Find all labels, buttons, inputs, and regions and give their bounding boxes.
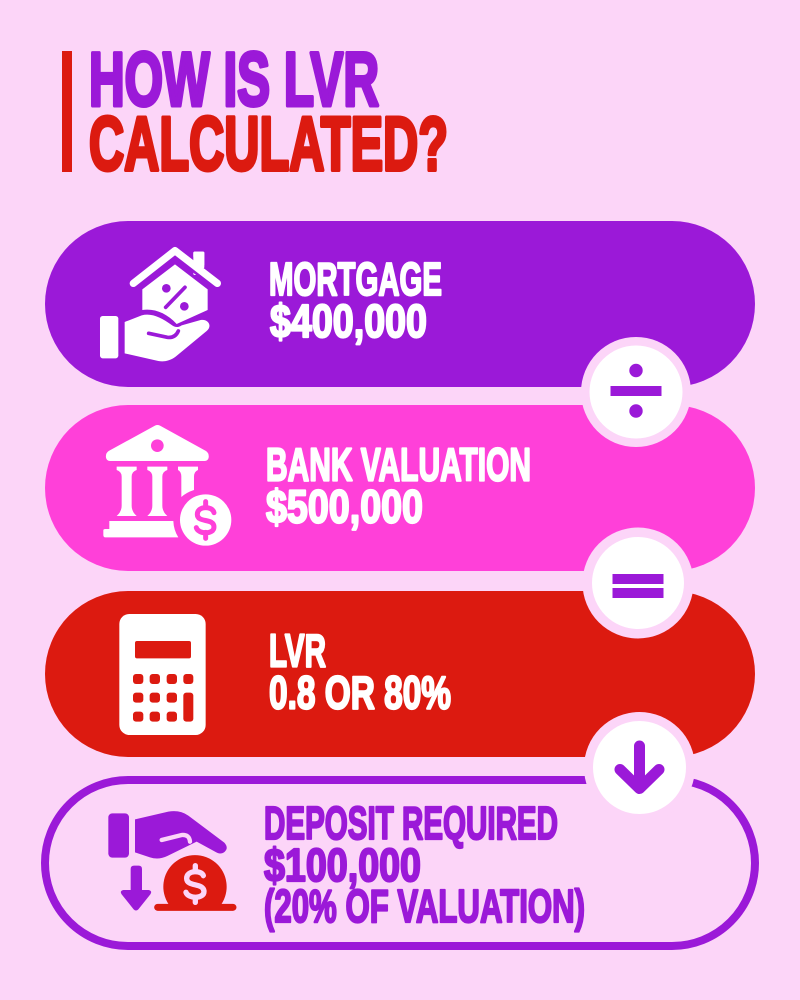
text: bank valuation: BANK VALUATION [266,438,531,490]
text: LVR: LVR [269,624,326,676]
icon: bank with dollar coin [103,425,231,546]
panel: LVR [45,591,755,757]
text: deposit required: $100,000 [264,839,421,891]
text: bank valuation [266,438,531,532]
text: deposit required: (20% OF VALUATION) [264,880,585,932]
icon: house in hand [100,251,217,361]
icon: hand over coin with down arrow [108,811,233,910]
text: deposit required [264,797,585,932]
text: mortgage: MORTGAGE [269,253,442,305]
text: bank valuation: $500,000 [266,480,423,532]
text: mortgage [269,253,442,347]
icon: down arrow badge [584,712,695,823]
text: LVR: 0.8 OR 80% [269,666,451,718]
title [62,38,448,187]
text: deposit required: DEPOSIT REQUIRED [264,797,558,849]
text: LVR [269,624,451,718]
panel: mortgage [45,221,755,387]
text: mortgage: $400,000 [270,295,427,347]
panel: bank valuation [45,405,755,571]
icon: calculator [119,614,206,735]
title: HOW IS LVR [89,38,379,122]
panel: deposit required [45,780,755,946]
icon: divide badge [581,337,691,447]
icon: equals badge [582,528,694,638]
title: CALCULATED? [89,102,448,187]
